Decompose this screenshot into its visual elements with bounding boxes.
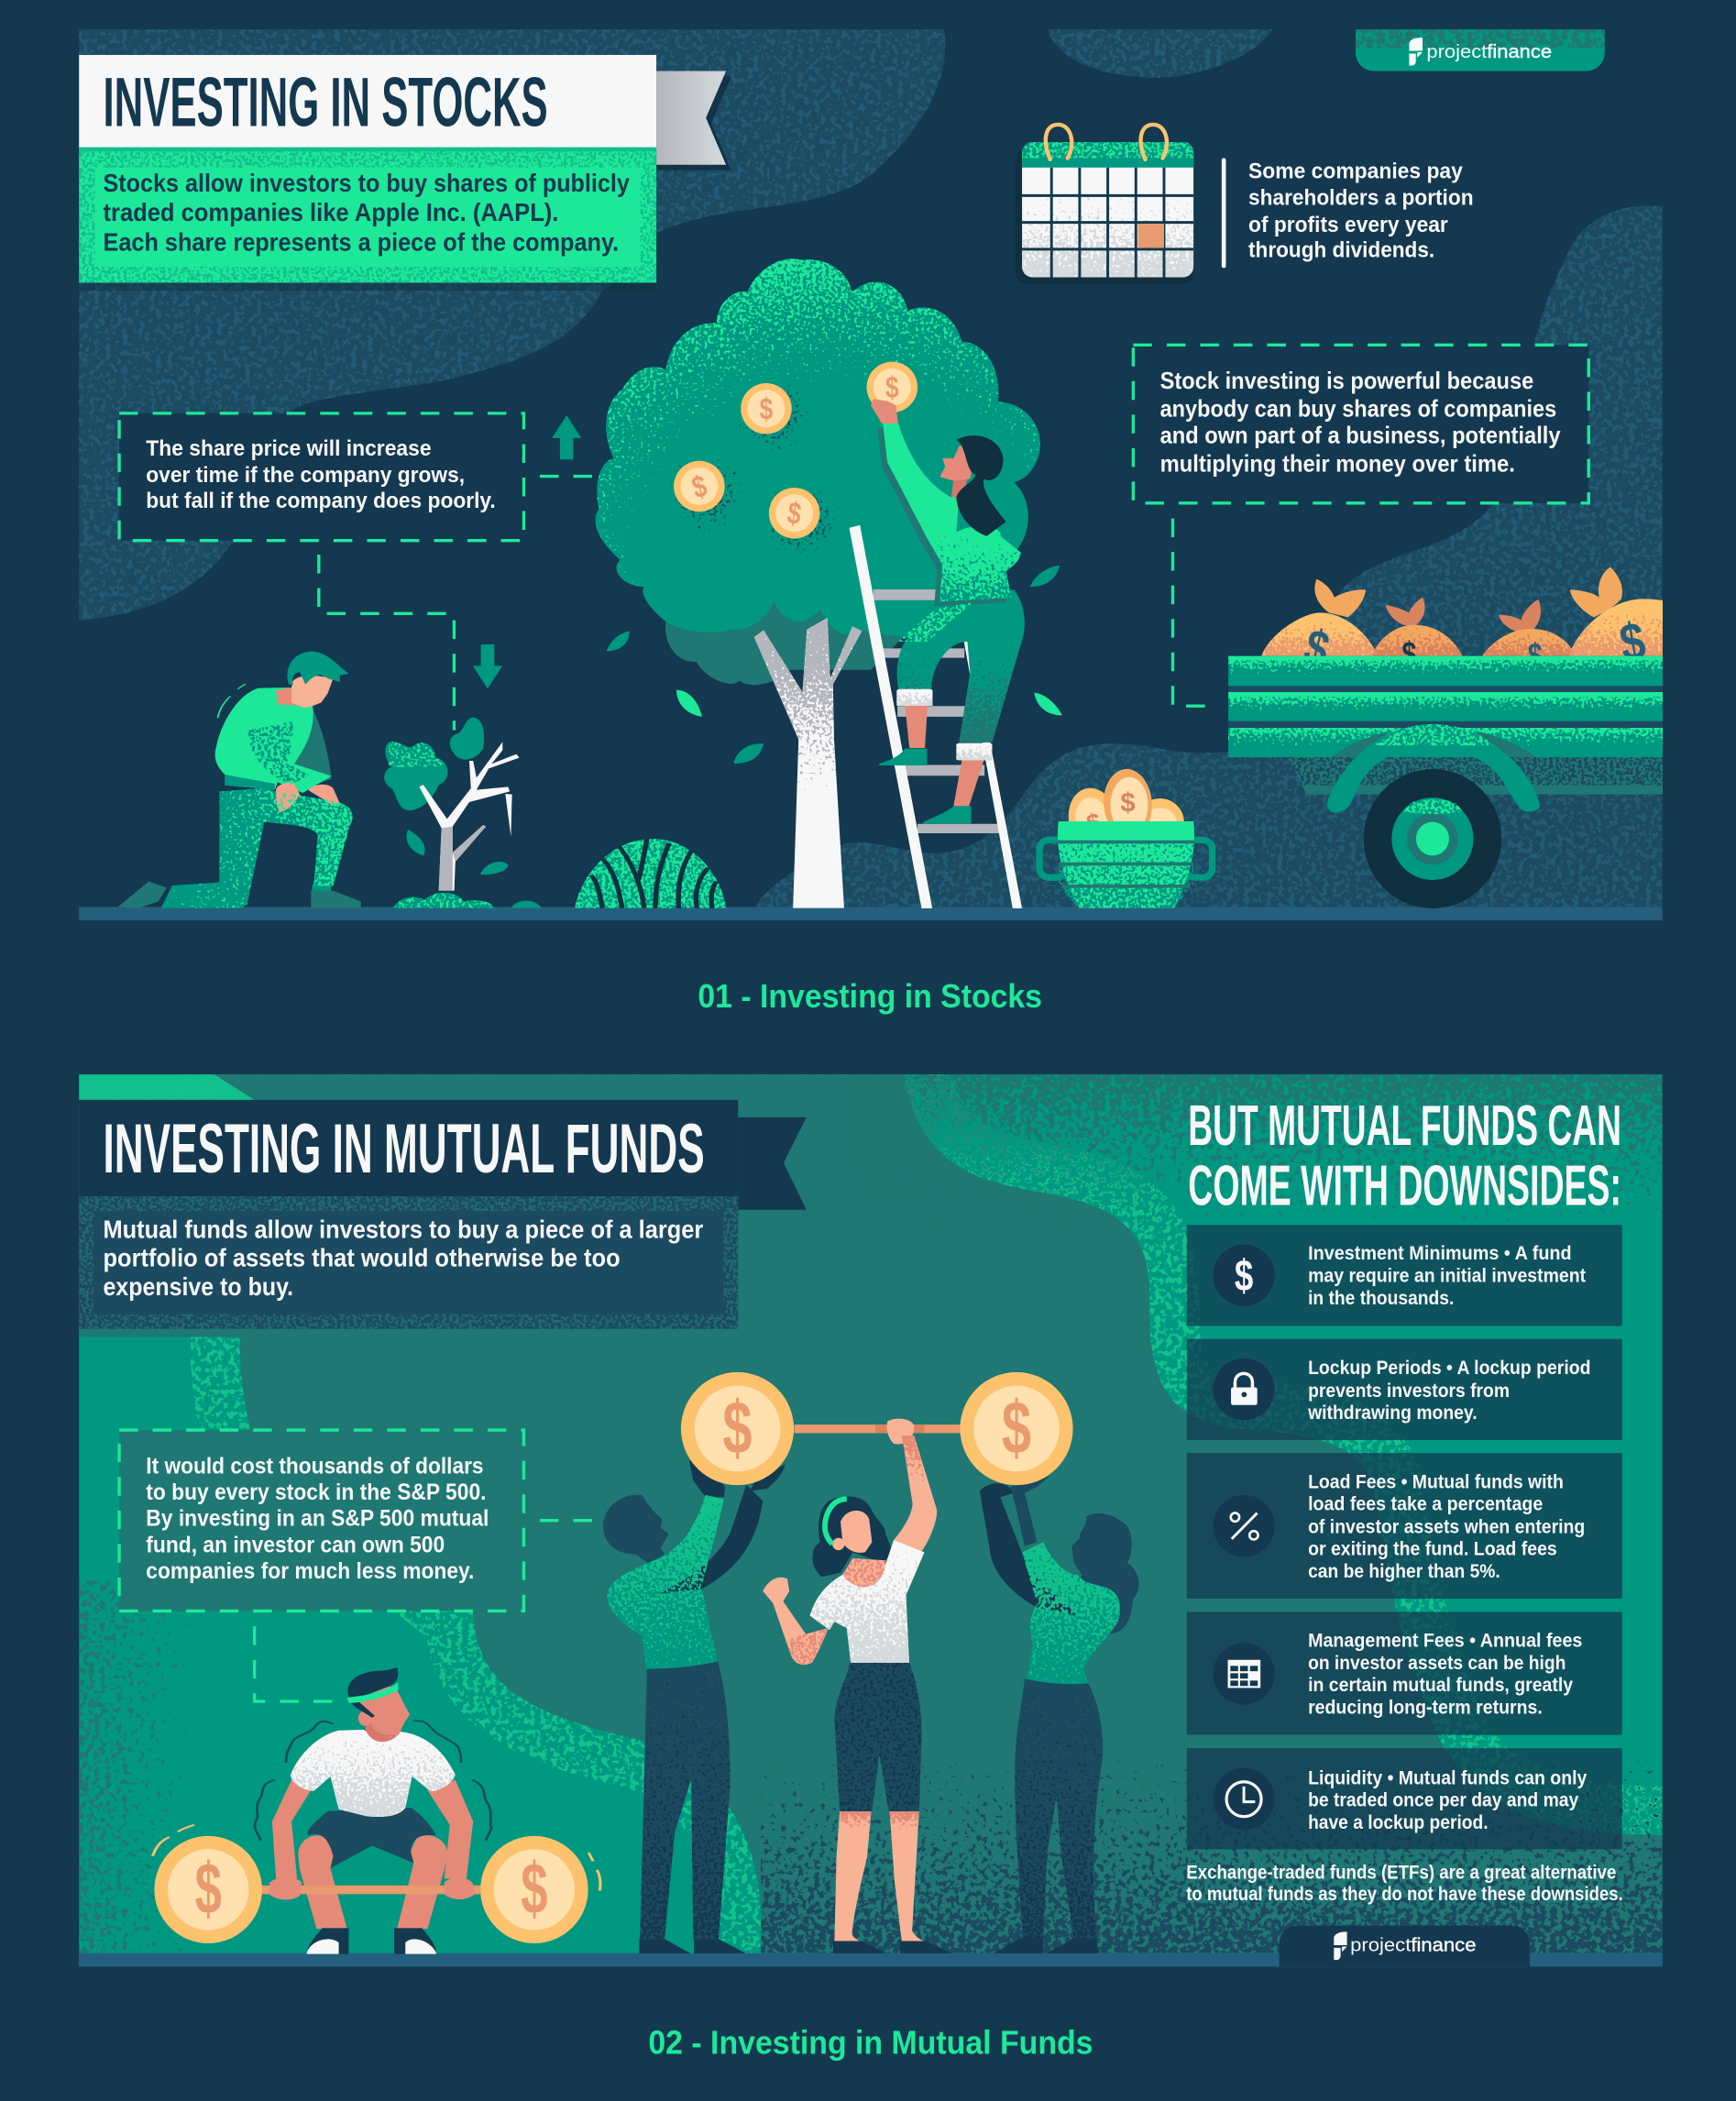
intro text panel: mutual funds: expensive to buy. bbox=[104, 1272, 293, 1301]
callout: share price: but fall if the company does poorly. bbox=[146, 489, 496, 513]
title banner: investing in stocks: INVESTING IN STOCKS bbox=[104, 63, 548, 141]
card: load fees: or exiting the fund. Load fees bbox=[1308, 1538, 1557, 1559]
icon: dollar bbox=[1213, 1245, 1275, 1306]
truck bed bbox=[1228, 656, 1663, 757]
money bags: $ bbox=[1401, 635, 1416, 674]
callout: stock investing is powerful: Stock investing is powerful because bbox=[1160, 368, 1533, 394]
card: investment minimums: may require an initial investment bbox=[1308, 1266, 1586, 1287]
callout: S&P 500 bbox=[119, 1430, 523, 1611]
right person bbox=[980, 1477, 1139, 1953]
ETF note bbox=[1186, 1863, 1623, 1905]
callout: share price: The share price will increase bbox=[146, 436, 432, 461]
dividend text: of profits every year bbox=[1248, 213, 1448, 237]
weightlifter: $ bbox=[521, 1848, 547, 1929]
dividend text: shareholders a portion bbox=[1248, 186, 1474, 211]
card: investment minimums bbox=[1187, 1225, 1622, 1326]
logo tab: projectfinance: project finance bbox=[1350, 1935, 1476, 1956]
panel: investing in stocks bbox=[79, 29, 1663, 920]
center woman bbox=[763, 1436, 951, 1953]
three people lifting bar: $ bbox=[722, 1387, 753, 1470]
pot of coins: $ bbox=[1120, 789, 1136, 819]
weightlifter bbox=[153, 1667, 600, 1954]
card: management fees: on investor assets can be high bbox=[1308, 1653, 1566, 1674]
left person bbox=[603, 1460, 786, 1953]
background shapes bbox=[79, 1074, 1663, 1953]
callout: stock investing is powerful bbox=[1133, 345, 1588, 503]
card: investment minimums: Investment Minimums • A fund bbox=[1308, 1243, 1572, 1264]
striped bush bbox=[575, 839, 726, 908]
coins on the tree: $ bbox=[885, 371, 899, 405]
caption: 01: 01 - Investing in Stocks bbox=[698, 978, 1042, 1015]
arrow down bbox=[473, 644, 502, 688]
money bags: $ bbox=[1616, 611, 1650, 674]
kneeling man bbox=[117, 652, 361, 908]
card: investment minimums: in the thousands. bbox=[1308, 1288, 1454, 1309]
logo tab: projectfinance bbox=[1280, 1926, 1530, 1966]
card: liquidity bbox=[1187, 1748, 1622, 1849]
card: load fees: can be higher than 5%. bbox=[1308, 1561, 1500, 1582]
icon: dollar: $ bbox=[1235, 1251, 1253, 1301]
truck with money bags bbox=[1228, 566, 1663, 908]
card: lockup periods bbox=[1187, 1339, 1622, 1440]
callout: S&P 500: It would cost thousands of dollars bbox=[146, 1455, 484, 1480]
truck wheel bbox=[1327, 724, 1540, 908]
callout: share price bbox=[119, 413, 523, 541]
money tree bbox=[596, 258, 1062, 908]
dividend text: through dividends. bbox=[1248, 238, 1434, 263]
barbell bbox=[681, 1372, 1073, 1485]
coins on the tree: $ bbox=[786, 497, 803, 532]
callout: S&P 500: By investing in an S&P 500 mutual bbox=[146, 1507, 489, 1532]
card: management fees: Management Fees • Annual fees bbox=[1308, 1631, 1582, 1652]
coins bbox=[154, 1836, 262, 1943]
card: management fees bbox=[1187, 1612, 1622, 1735]
stress lines bbox=[255, 1721, 491, 1841]
intro text panel: stocks: traded companies like Apple Inc. (AAPL). bbox=[104, 198, 558, 226]
callout: stock investing is powerful: and own part of a business, potentially bbox=[1160, 424, 1561, 449]
connector line: to truck bbox=[1172, 519, 1213, 706]
floor band bbox=[79, 1953, 1663, 1966]
three people lifting bar: $ bbox=[1002, 1387, 1031, 1470]
logo tab: projectfinance bbox=[1356, 29, 1605, 71]
intro text panel: mutual funds: portfolio of assets that would otherwise be too bbox=[104, 1244, 621, 1272]
sapling bbox=[384, 718, 542, 908]
ladder bbox=[850, 525, 1022, 908]
title banner: investing in stocks bbox=[79, 55, 731, 170]
card: load fees: of investor assets when entering bbox=[1308, 1516, 1585, 1537]
card: lockup periods: prevents investors from bbox=[1308, 1380, 1510, 1402]
weightlifter: $ bbox=[195, 1848, 222, 1929]
card: management fees: reducing long-term returns. bbox=[1308, 1698, 1543, 1719]
intro text panel: stocks: Each share represents a piece of the company. bbox=[104, 227, 619, 256]
icon: percent bbox=[1213, 1495, 1275, 1556]
money bags: $ bbox=[1299, 618, 1335, 678]
title banner: mutual funds bbox=[79, 1100, 813, 1217]
money bags bbox=[1261, 566, 1663, 678]
arrow up bbox=[552, 415, 581, 459]
callout: stock investing is powerful: anybody can buy shares of companies bbox=[1160, 397, 1556, 423]
card: load fees bbox=[1187, 1453, 1622, 1599]
dividend text: Some companies pay bbox=[1248, 159, 1463, 183]
pot of coins: $ bbox=[1083, 808, 1104, 837]
coins on the tree bbox=[665, 362, 917, 560]
calendar icon bbox=[1016, 125, 1193, 284]
truck shadow bbox=[1288, 757, 1663, 795]
card: liquidity: be traded once per day and may bbox=[1308, 1789, 1578, 1810]
callout: share price: over time if the company grows, bbox=[146, 463, 465, 488]
money bags: $ bbox=[1528, 637, 1543, 676]
callout: S&P 500: fund, an investor can own 500 bbox=[146, 1533, 445, 1557]
card: lockup periods: Lockup Periods • A lockup period bbox=[1308, 1358, 1590, 1379]
intro text panel: mutual funds bbox=[79, 1196, 738, 1337]
intro text panel: mutual funds: Mutual funds allow investors to buy a piece of a larger bbox=[104, 1215, 703, 1243]
card: load fees: Load Fees • Mutual funds with bbox=[1308, 1472, 1564, 1493]
heading: downsides bbox=[1188, 1094, 1621, 1218]
card: management fees: in certain mutual funds, greatly bbox=[1308, 1675, 1573, 1696]
callout: stock investing is powerful: multiplying their money over time. bbox=[1160, 451, 1515, 477]
card: load fees: load fees take a percentage bbox=[1308, 1493, 1543, 1514]
three people lifting bar bbox=[603, 1372, 1139, 1953]
woman picking coin bbox=[871, 399, 1025, 823]
background blobs bbox=[79, 29, 1663, 907]
card: lockup periods: withdrawing money. bbox=[1307, 1402, 1478, 1424]
ETF note: to mutual funds as they do not have these downsides. bbox=[1186, 1884, 1623, 1905]
coins on the tree: $ bbox=[760, 392, 773, 426]
connector lines: S&P 500 bbox=[255, 1521, 593, 1701]
coins on the tree: $ bbox=[688, 469, 710, 505]
intro text panel: stocks bbox=[79, 148, 656, 291]
card: liquidity: Liquidity • Mutual funds can only bbox=[1308, 1767, 1588, 1788]
icon: padlock bbox=[1213, 1358, 1275, 1420]
dividend text bbox=[1222, 158, 1474, 268]
caption: 02: 02 - Investing in Mutual Funds bbox=[648, 2024, 1093, 2061]
panel: investing in mutual funds bbox=[79, 1074, 1663, 1966]
callout: S&P 500: to buy every stock in the S&P 500. bbox=[146, 1480, 486, 1505]
card: liquidity: have a lockup period. bbox=[1308, 1812, 1489, 1833]
icon: table bbox=[1213, 1643, 1275, 1705]
icon: clock bbox=[1213, 1768, 1275, 1830]
logo tab: projectfinance: project finance bbox=[1426, 41, 1552, 62]
connector lines: share price bbox=[319, 477, 596, 731]
ETF note: Exchange-traded funds (ETFs) are a great alternative bbox=[1186, 1863, 1617, 1884]
title banner: mutual funds: INVESTING IN MUTUAL FUNDS bbox=[104, 1110, 705, 1188]
intro text panel: stocks: Stocks allow investors to buy shares of publicly bbox=[104, 169, 630, 197]
floor band bbox=[79, 907, 1663, 920]
falling leaves bbox=[607, 566, 1062, 764]
callout: S&P 500: companies for much less money. bbox=[146, 1559, 474, 1584]
pot of coins bbox=[1039, 767, 1213, 908]
